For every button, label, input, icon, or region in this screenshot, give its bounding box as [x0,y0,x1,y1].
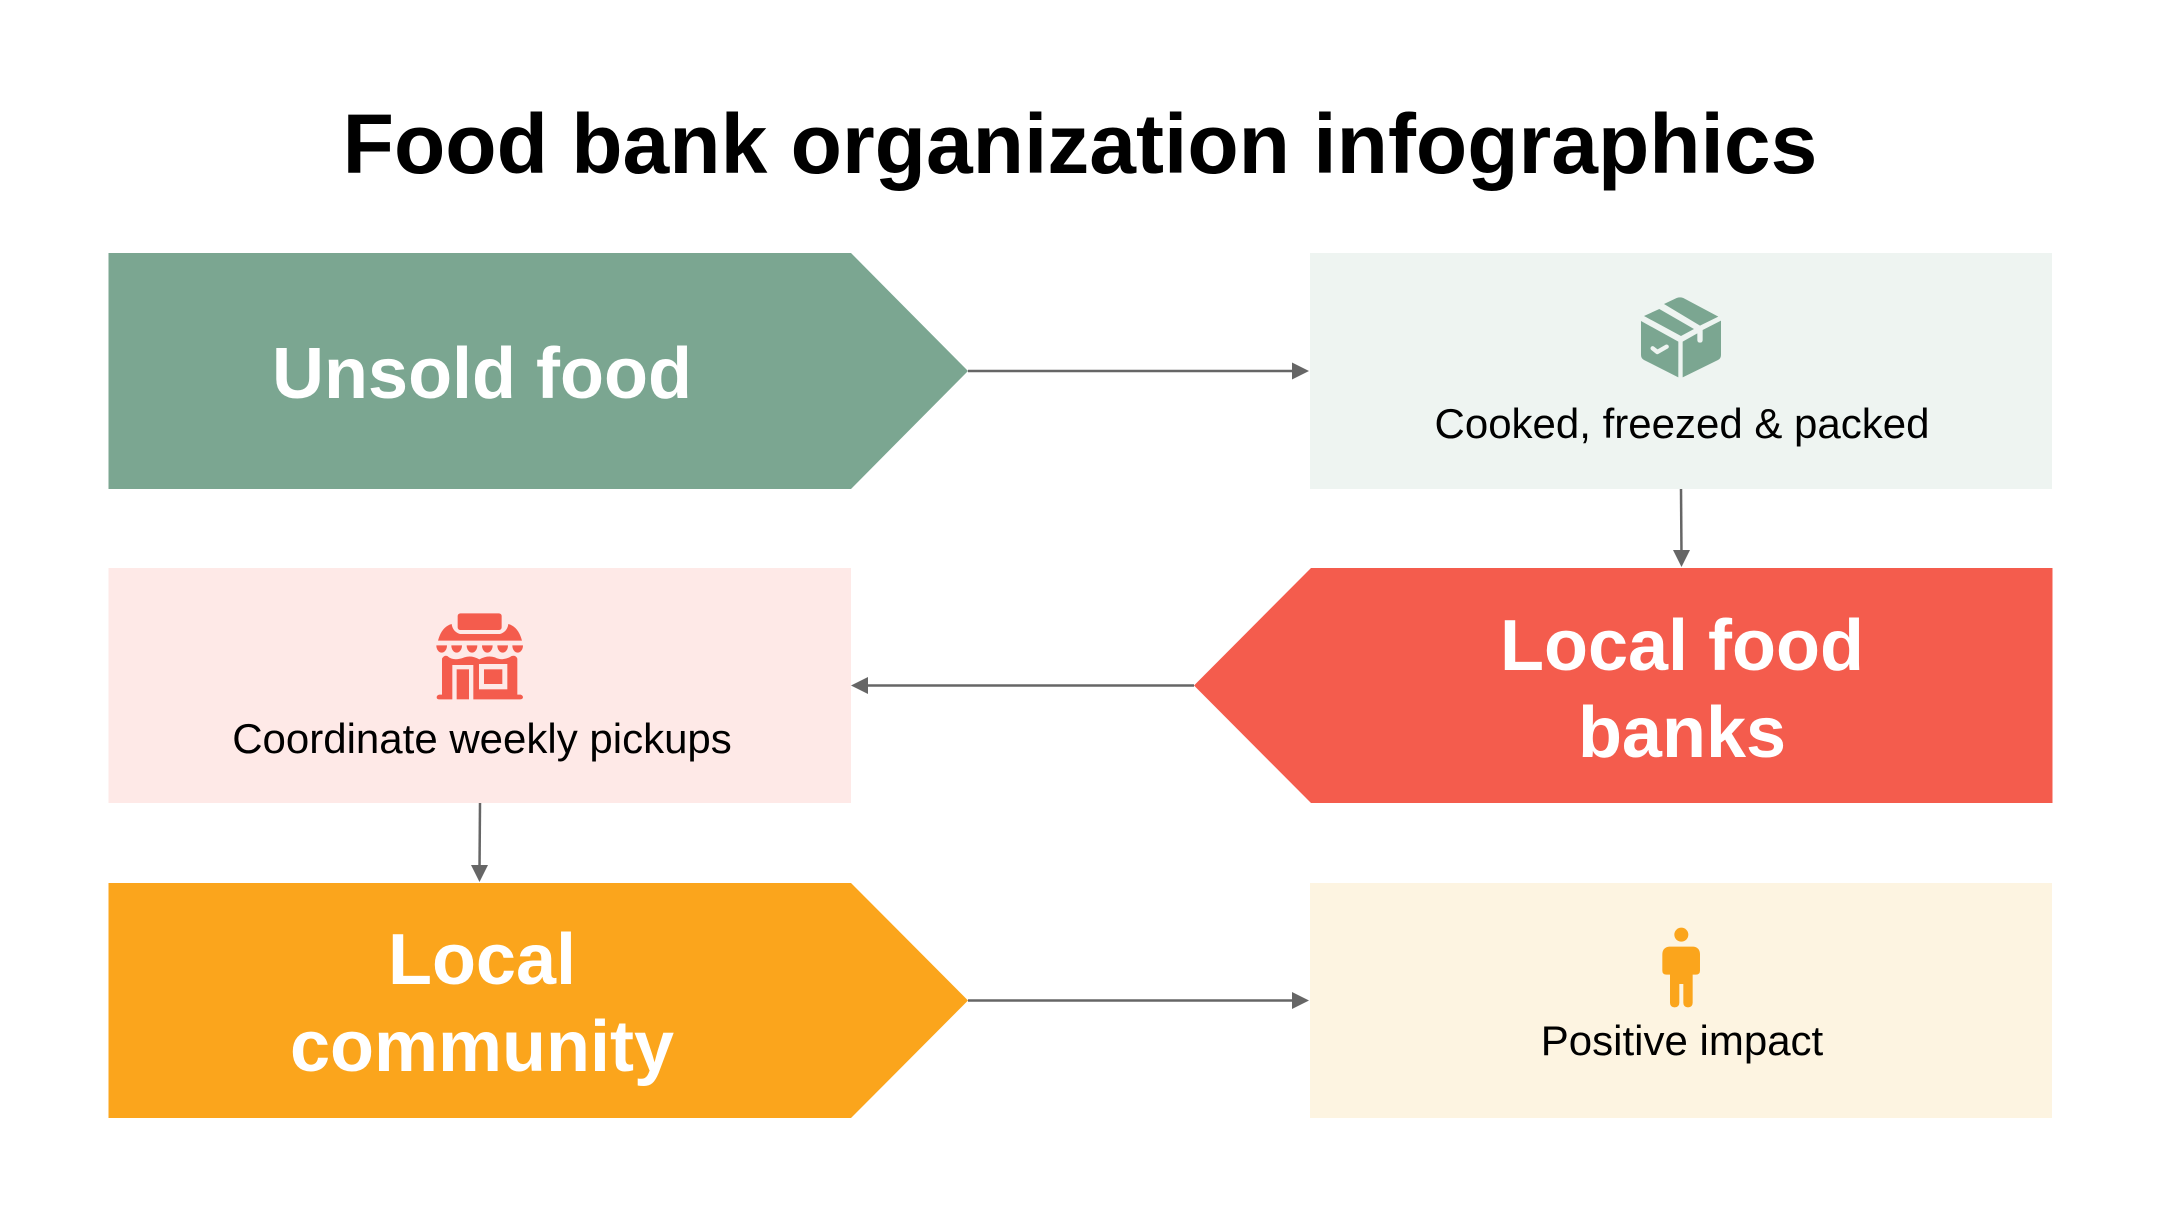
panel: local food banks: banks [1578,693,1786,773]
panel: local community: Local [388,920,576,1000]
panel: unsold food: Unsold food [272,334,692,414]
icon: store [436,613,523,700]
arrow: local community to positive impact [968,992,1309,1009]
panel: positive impact [1310,883,2052,1118]
panel: local community [108,883,968,1118]
icon: packed box [1641,297,1721,377]
arrow: local food banks to weekly pickups [851,677,1194,694]
panel: cooked, freezed and packed: Cooked, freezed & packed [1435,400,1929,447]
icon: person [1662,928,1700,1007]
arrow: unsold food to cooked [968,362,1309,380]
panel: local food banks: Local food [1500,606,1864,686]
title: Food bank organization infographics [343,97,1817,191]
panel: unsold food [108,253,968,489]
panel: local food banks [1194,568,2052,803]
panel: cooked, freezed and packed [1310,253,2052,489]
panel: coordinate weekly pickups [108,568,851,803]
panel: local community: community [290,1007,674,1087]
arrow: cooked to local food banks [1673,489,1690,567]
panel: positive impact: Positive impact [1541,1017,1824,1064]
panel: coordinate weekly pickups: Coordinate weekly pickups [232,715,732,762]
arrow: weekly pickups to local community [471,803,488,882]
